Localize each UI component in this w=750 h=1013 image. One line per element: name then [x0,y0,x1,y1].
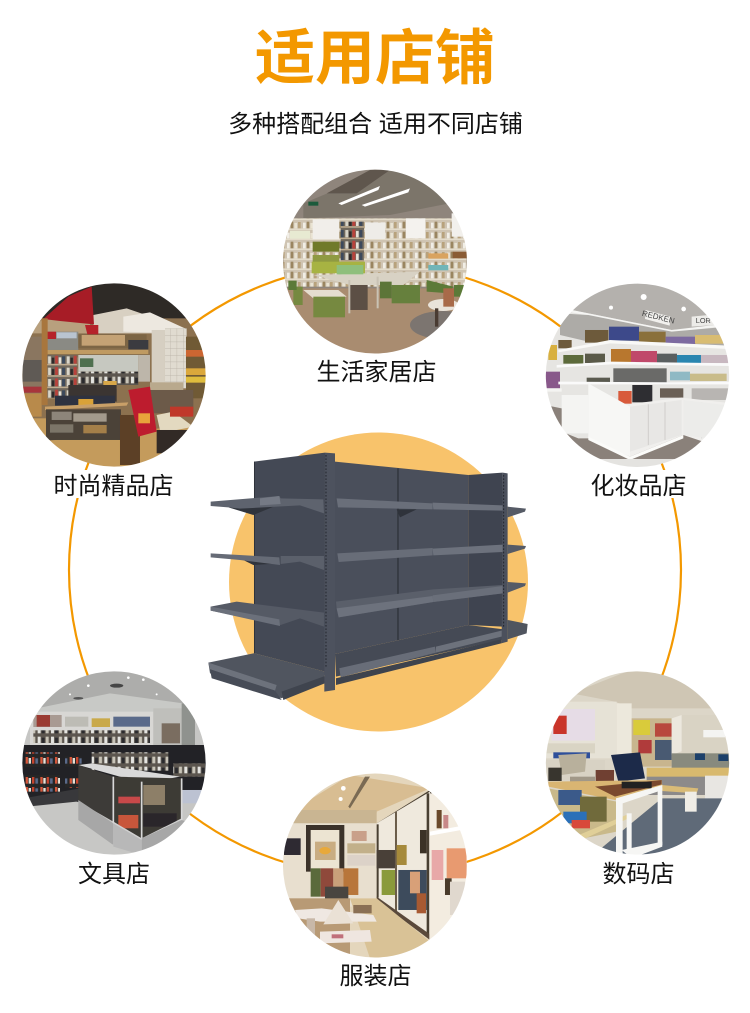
label: 文具店: 文具店 [78,861,150,888]
photo: cosmetics store: REDKEN [641,309,676,326]
label background: boutique [50,470,178,498]
product: gondola shelf [208,453,528,700]
label: 时尚精品店: 时尚精品店 [54,473,174,500]
label: 服装店: 服装店 [340,963,412,990]
label: 数码店: 数码店 [602,861,674,888]
photo: lifestyle home store [283,170,467,354]
photo: digital store [546,671,730,854]
label: 生活家居店: 生活家居店 [316,359,436,386]
title: 适用店铺 [255,25,495,92]
photo: cosmetics store [546,284,729,467]
connecting ring [69,264,681,876]
photo: clothing store [283,774,467,958]
label background: cosmetics [586,470,690,498]
label: 化妆品店: 化妆品店 [590,473,686,500]
photo: stationery store [22,671,206,855]
orange disc behind shelf [229,432,528,732]
subtitle: 多种搭配组合 适用不同店铺 [228,111,523,138]
photo: boutique store [22,283,206,467]
photo: cosmetics store: LOR [696,316,711,325]
